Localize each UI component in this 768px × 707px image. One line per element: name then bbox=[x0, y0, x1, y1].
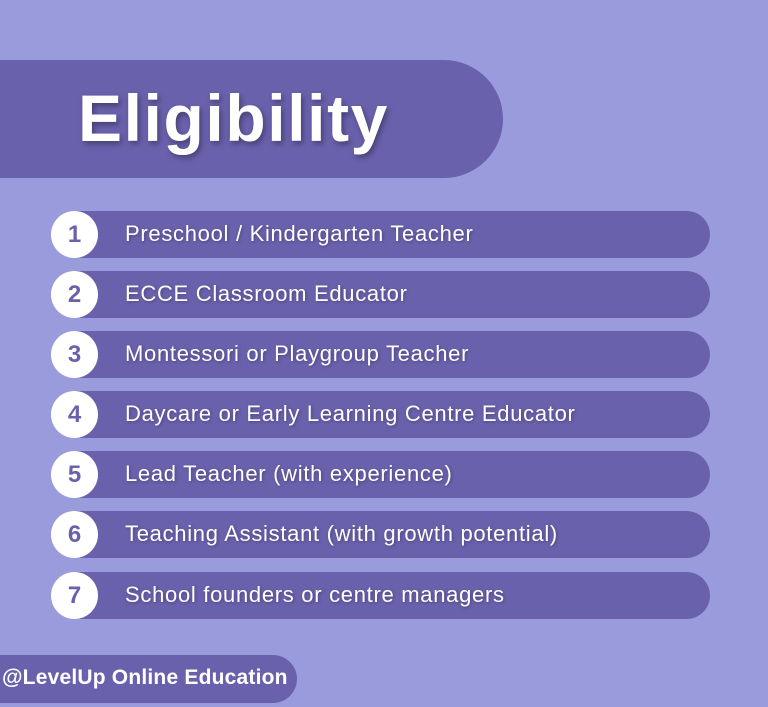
item 1 bbox=[51, 211, 710, 258]
item 1: Preschool / Kindergarten Teacher bbox=[125, 221, 474, 246]
item 3: Montessori or Playgroup Teacher bbox=[125, 341, 469, 366]
item 7 bbox=[51, 572, 710, 619]
item 2: 2 bbox=[68, 281, 81, 308]
item 7: School founders or centre managers bbox=[125, 582, 505, 607]
item 6: 6 bbox=[68, 521, 81, 548]
item 1: 1 bbox=[68, 221, 81, 248]
item 5: 5 bbox=[68, 461, 81, 488]
item 4: 4 bbox=[68, 401, 81, 428]
item 5 bbox=[51, 451, 710, 498]
item 6 bbox=[51, 511, 710, 558]
footer credit: @LevelUp Online Education bbox=[2, 666, 288, 689]
item 3: 3 bbox=[68, 341, 81, 368]
item 5: Lead Teacher (with experience) bbox=[125, 461, 453, 486]
item 4: Daycare or Early Learning Centre Educator bbox=[125, 401, 576, 426]
item 3 bbox=[51, 331, 710, 378]
item 7: 7 bbox=[68, 582, 81, 609]
title bbox=[0, 60, 503, 178]
item 4 bbox=[51, 391, 710, 438]
title: Eligibility bbox=[78, 81, 389, 155]
footer credit bbox=[0, 655, 297, 703]
item 6: Teaching Assistant (with growth potential) bbox=[125, 521, 558, 546]
item 2: ECCE Classroom Educator bbox=[125, 281, 408, 306]
item 2 bbox=[51, 271, 710, 318]
